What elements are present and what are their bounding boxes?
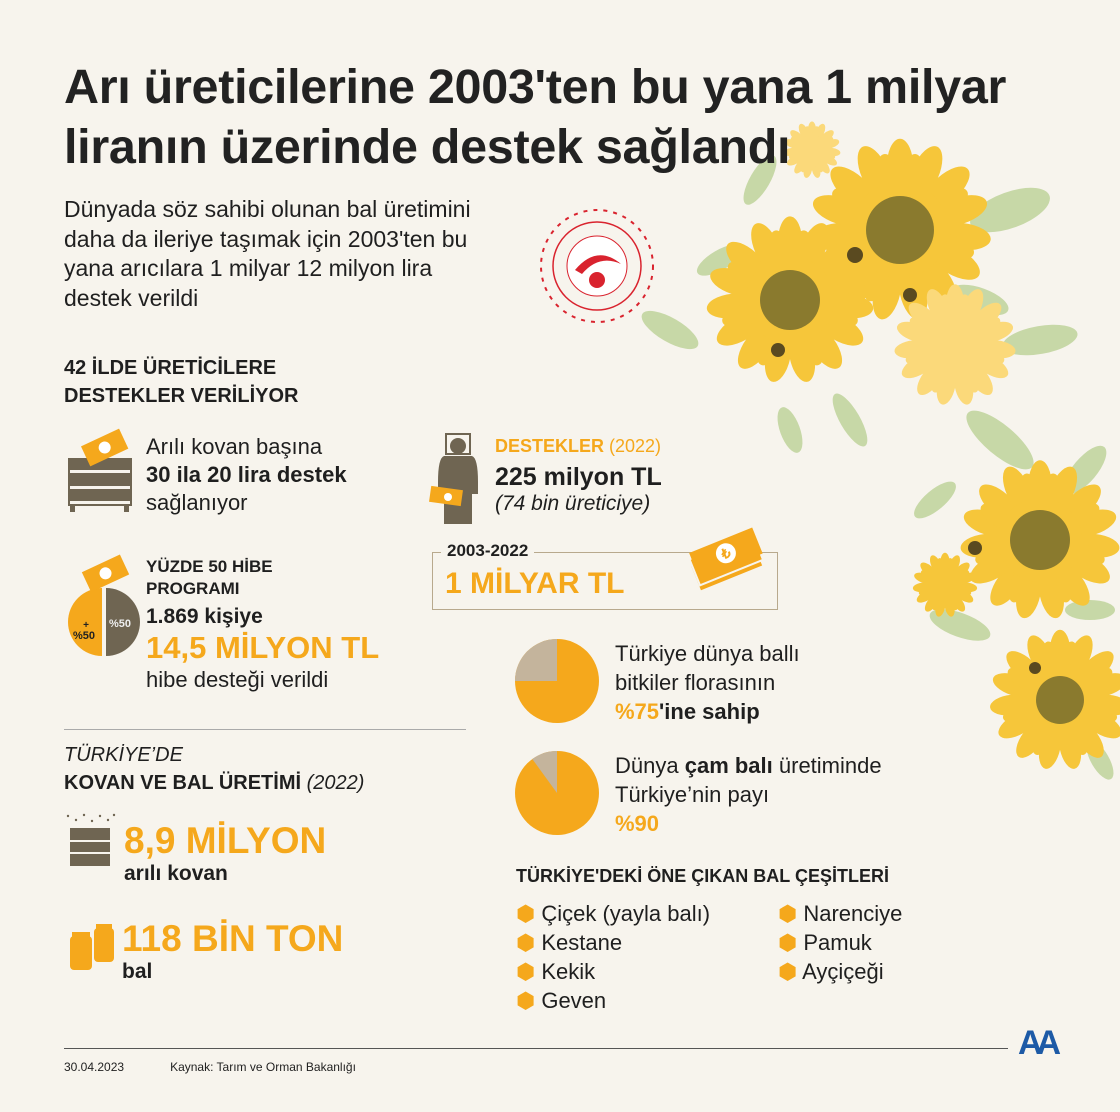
text: hibe programı: 1.869 kişiye [146, 605, 263, 628]
list: bal çeşitleri: ⬢ Pamuk [778, 930, 872, 955]
text: hibe programı [146, 557, 379, 692]
intro text: Dünyada söz sahibi olunan bal üretimini [64, 196, 471, 222]
list: bal çeşitleri: ⬢ Kekik [516, 959, 595, 984]
panel: 2003-2022 total: 1 MİLYAR TL [445, 567, 624, 600]
icon: beekeeper [429, 433, 478, 524]
list: bal çeşitleri: ⬢ Ayçiçeği [778, 959, 884, 984]
text: flora: Türkiye dünya ballı [615, 641, 800, 666]
chart: pie 75% [515, 639, 599, 723]
text: hibe programı: YÜZDE 50 HİBE [146, 557, 273, 576]
list: bal çeşitleri: ⬢ Kestane [516, 930, 622, 955]
text: destekler 2022: 225 milyon TL [495, 463, 662, 491]
text: flora: bitkiler florasının [615, 670, 775, 695]
icon: hibe pie: %50 [73, 630, 95, 642]
stat: 8,9 milyon [124, 820, 326, 885]
text: flora [615, 641, 800, 724]
text: 2003-2022 [447, 541, 528, 560]
stat: 8,9 milyon: 8,9 MİLYON [124, 820, 326, 861]
list: bal çeşitleri: ⬢ Çiçek (yayla balı) [516, 901, 710, 926]
text: kovan başına: 30 ila 20 lira destek [146, 462, 347, 487]
stat: 8,9 milyon: arılı kovan [124, 862, 228, 885]
list: bal çeşitleri [516, 901, 902, 1013]
text: destekler 2022: DESTEKLER (2022) [495, 436, 661, 456]
footer line [64, 1048, 1008, 1049]
text: kovan başına: Arılı kovan başına [146, 434, 322, 459]
icon: hive [66, 814, 116, 866]
text: kovan başına [146, 434, 347, 515]
stat: 118 bin ton: bal [122, 960, 152, 983]
panel: 2003-2022 total [432, 552, 778, 610]
icon: hibe pie [68, 554, 140, 656]
heading: 42 ilde: DESTEKLER VERİLİYOR [64, 385, 298, 407]
stat: 118 bin ton [122, 918, 343, 983]
text: destekler 2022 [495, 436, 662, 515]
intro text: daha da ileriye taşımak için 2003'ten bu [64, 226, 467, 252]
heading: kovan ve bal: TÜRKİYE’DE [64, 744, 183, 766]
list: bal çeşitleri: ⬢ Narenciye [778, 901, 902, 926]
text: çam balı: Dünya çam balı üretiminde [615, 753, 882, 778]
intro text [64, 196, 471, 310]
text: çam balı: Türkiye’nin payı [615, 782, 769, 807]
divider [64, 729, 466, 730]
heading: kovan ve bal [64, 744, 364, 794]
intro text: yana arıcılara 1 milyar 12 milyon lira [64, 255, 432, 281]
decoration: sunflowers [557, 122, 1120, 780]
icon: money stack: ₺ [718, 544, 733, 563]
heading: kovan ve bal: KOVAN VE BAL ÜRETİMİ (2022) [64, 772, 364, 794]
intro text: destek verildi [64, 284, 198, 310]
icon: honey jars [70, 924, 114, 970]
text: hibe programı: PROGRAMI [146, 579, 240, 598]
text: hibe programı: hibe desteği verildi [146, 667, 328, 692]
title: Arı üreticilerine 2003'ten bu yana 1 milyar [64, 60, 1006, 114]
icon: money stack [689, 528, 763, 590]
icon: hive drawer with money [68, 428, 132, 512]
text: çam balı [615, 753, 882, 836]
heading: 42 ilde [64, 356, 298, 407]
heading: bal çeşitleri: TÜRKİYE'DEKİ ÖNE ÇIKAN BAL ÇEŞİTLERİ [516, 866, 889, 886]
footer: date and source: 30.04.2023 Kaynak: Tarım ve Orman Bakanlığı [64, 1060, 356, 1074]
icon: hibe pie: %50 [109, 618, 131, 630]
heading: 42 ilde: 42 İLDE ÜRETİCİLERE [64, 357, 276, 379]
icon: hibe pie: + [83, 620, 89, 631]
stat: 118 bin ton: 118 BİN TON [122, 918, 343, 959]
icon: ministry logo [540, 130, 922, 366]
chart: pie 90% [515, 751, 599, 835]
text: hibe programı: 14,5 MİLYON TL [146, 630, 379, 665]
text: çam balı: %90 [615, 811, 659, 836]
icon: AA logo: AA [1018, 1024, 1055, 1062]
text: kovan başına: sağlanıyor [146, 490, 248, 515]
text: flora: %75'ine sahip [615, 699, 760, 724]
list: bal çeşitleri: ⬢ Geven [516, 988, 606, 1013]
text: destekler 2022: (74 bin üreticiye) [495, 492, 650, 515]
title: liranın üzerinde destek sağlandı [64, 120, 790, 174]
title [64, 60, 1006, 174]
